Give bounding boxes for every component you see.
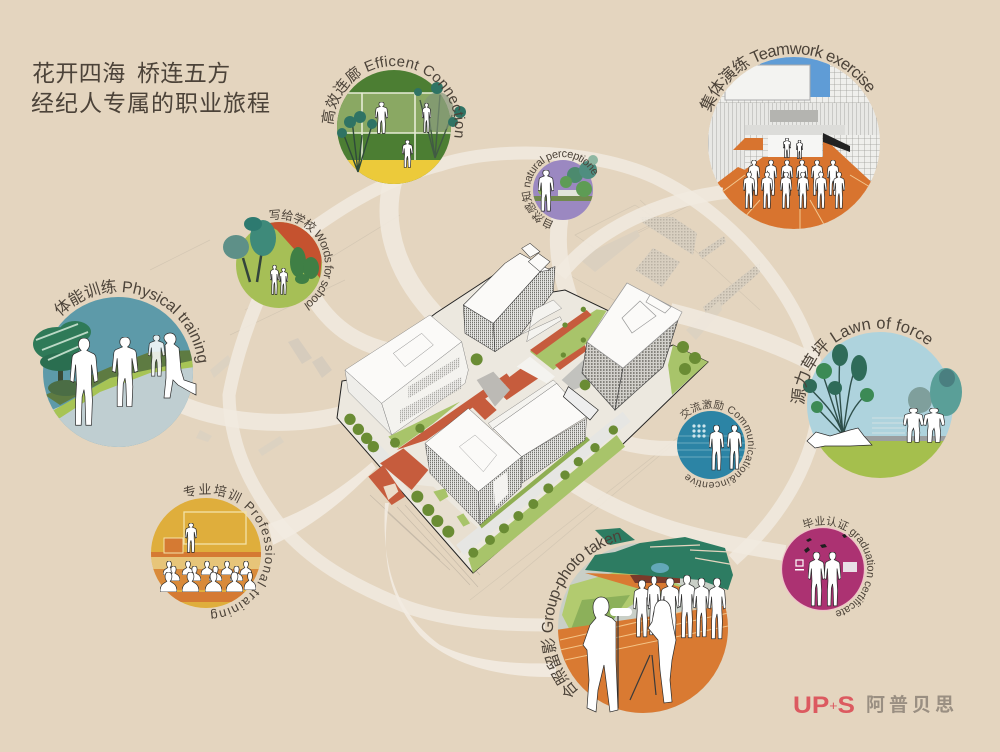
icon: tall tree (803, 344, 874, 435)
street trees (344, 307, 618, 558)
icon: right shrub (414, 82, 466, 158)
panel: natural perception (522, 151, 598, 229)
title (31, 60, 271, 116)
logo (793, 692, 958, 719)
ribbon: group photo lower (385, 503, 556, 677)
panel: group photo taken (540, 528, 733, 713)
icon: green canopy (585, 528, 735, 590)
label: 自然感知 natural perceptione (522, 151, 598, 229)
courtyard strip (488, 380, 558, 430)
runners (70, 333, 196, 425)
label: 源力草坪 Lawn of force (790, 317, 932, 404)
figures (270, 265, 288, 294)
panel: communication and incentive (677, 399, 756, 488)
ribbon: efficient connection (389, 180, 440, 320)
connection ribbons (178, 153, 819, 625)
group of people (633, 575, 726, 639)
icon: teal bushes (908, 368, 962, 416)
panel: lawn of force (790, 317, 962, 478)
logo: + (829, 698, 838, 713)
soft tan pavement (403, 483, 480, 553)
building: right tower (582, 283, 682, 410)
red plaza (368, 310, 592, 505)
ribbon: words for school (315, 300, 395, 352)
ribbon: physical training (178, 403, 340, 422)
label: 毕业认证 graduation certificate (802, 516, 876, 616)
icon: trees (223, 217, 319, 284)
ribbon: professional training (268, 462, 376, 545)
ribbon: graduation (575, 485, 785, 553)
team rows (743, 160, 845, 208)
label: 专业培训 Professional training (184, 483, 275, 619)
ribbon: large loop (229, 153, 819, 625)
central campus model (337, 243, 708, 573)
ribbon: natural perception (558, 218, 570, 300)
building: top centre (463, 243, 555, 352)
panel: physical training (33, 279, 206, 447)
panel: graduation certificate (781, 516, 876, 616)
title: 花开四海 (32, 60, 126, 86)
site ground (337, 255, 708, 573)
road strips (363, 417, 627, 550)
photographer (583, 597, 632, 712)
ribbon: teamwork (560, 190, 745, 275)
right block trees (668, 341, 708, 395)
building: left block (345, 315, 468, 435)
building: bottom block (425, 383, 587, 525)
figures (709, 425, 742, 470)
logo: 阿普贝思 (866, 694, 958, 716)
ribbon: communication (590, 430, 680, 448)
ribbon: lawn of force (670, 312, 812, 362)
figures (808, 552, 841, 606)
reclining figure (807, 428, 872, 448)
walkers (375, 102, 431, 167)
woman with camera (648, 600, 676, 703)
screen outline (184, 512, 246, 544)
presenter (185, 523, 197, 552)
logo: S (838, 692, 855, 719)
icon: dot grid (692, 424, 706, 438)
label: 交流激励 Communication&incentive (680, 399, 756, 488)
panel: teamwork exercise (699, 44, 880, 229)
icon: left shrub (337, 111, 377, 172)
audience (160, 561, 256, 592)
icon: wind-blown tree (33, 321, 91, 396)
logo: UP (793, 692, 826, 719)
label: 集体演练 Teamwork exercise (699, 44, 874, 112)
tripod (618, 612, 656, 708)
photographer (538, 170, 554, 211)
label: 写给学校 Words for school (269, 209, 334, 311)
panel: efficient connection (321, 56, 466, 184)
panel: words for school (223, 209, 334, 311)
icon: caps and certificate (795, 534, 857, 572)
seated couple (903, 408, 945, 442)
label: 高效连廊 Efficent Connection (321, 56, 466, 138)
faded site plan context (150, 200, 760, 600)
title: 桥连五方 (137, 60, 231, 86)
label: 体能训练 Physical training (54, 279, 206, 363)
grey courtyard (477, 372, 510, 407)
panel: professional training (151, 483, 275, 619)
icon: plants (538, 155, 598, 197)
title: 经纪人专属的职业旅程 (31, 90, 271, 116)
label: 合照留影 Group-photo taken (540, 532, 622, 698)
lectern (164, 538, 183, 553)
green lawn (530, 309, 607, 370)
presenters (783, 138, 803, 159)
outer tree lawn (468, 435, 625, 573)
